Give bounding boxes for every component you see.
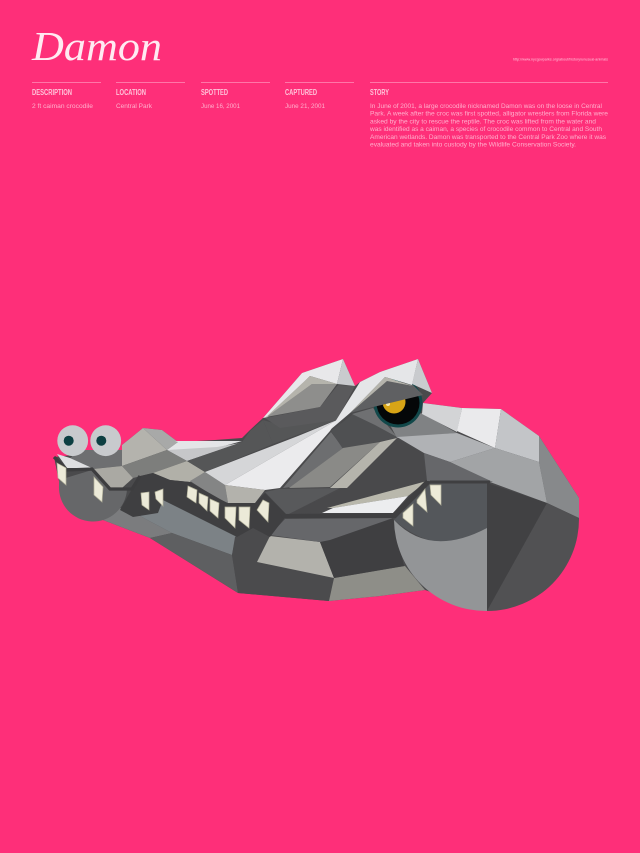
mouth interior — [394, 483, 487, 543]
icon: eye — [374, 378, 422, 428]
brow — [330, 359, 432, 430]
mouth line — [430, 480, 490, 484]
column: spotted: SPOTTED — [201, 88, 228, 97]
eye bumps — [57, 425, 121, 456]
nasal ridge — [263, 359, 355, 444]
column: story: asked by the city to rescue the reptile. The croc was lifted from the water and — [370, 118, 597, 125]
cheek facets — [280, 408, 431, 518]
column: description: DESCRIPTION — [32, 88, 72, 97]
column: story: evaluated and taken into custody by the Wildlife Conservation Society. — [370, 142, 576, 148]
column: captured: June 21, 2001 — [285, 104, 326, 110]
column: story: STORY — [370, 88, 389, 97]
column: description — [32, 82, 101, 110]
column: location: LOCATION — [116, 88, 146, 97]
column: spotted: June 16, 2001 — [201, 104, 241, 110]
mid face facets — [205, 420, 340, 515]
lower jaw facets — [103, 500, 425, 601]
source url: http://www.nycgovparks.org/about/history/unusual-animals — [513, 58, 608, 62]
right head facets — [390, 403, 579, 518]
column: spotted — [201, 82, 270, 110]
teeth — [57, 463, 441, 528]
column: location — [116, 82, 185, 110]
column: description: 2 ft caiman crocodile — [32, 104, 94, 110]
column: story: Park. A week after the croc was first spotted, alligator wrestlers from Florida were — [370, 111, 609, 118]
column: story: In June of 2001, a large crocodile nicknamed Damon was on the loose in Central — [370, 103, 602, 110]
jaw: dark triangle — [487, 483, 547, 611]
mouth band — [120, 473, 287, 537]
snout facets — [70, 420, 273, 503]
column: story: American wetlands. Damon was transported to the Central Park Zoo where it was — [370, 134, 606, 141]
column: story: was identified as a caiman, a species of crocodile common to Central and South — [369, 126, 603, 133]
lower jaw round snout — [59, 470, 127, 522]
column: captured: CAPTURED — [285, 88, 317, 97]
column: captured — [285, 82, 354, 110]
snout upper lip — [54, 454, 140, 489]
jaw: outer dark segment — [487, 503, 579, 611]
jaw: light segment — [394, 520, 487, 611]
column: location: Central Park — [116, 104, 153, 110]
title: Damon — [31, 23, 162, 69]
illustration: caiman head — [54, 359, 579, 611]
column: story — [369, 82, 609, 148]
